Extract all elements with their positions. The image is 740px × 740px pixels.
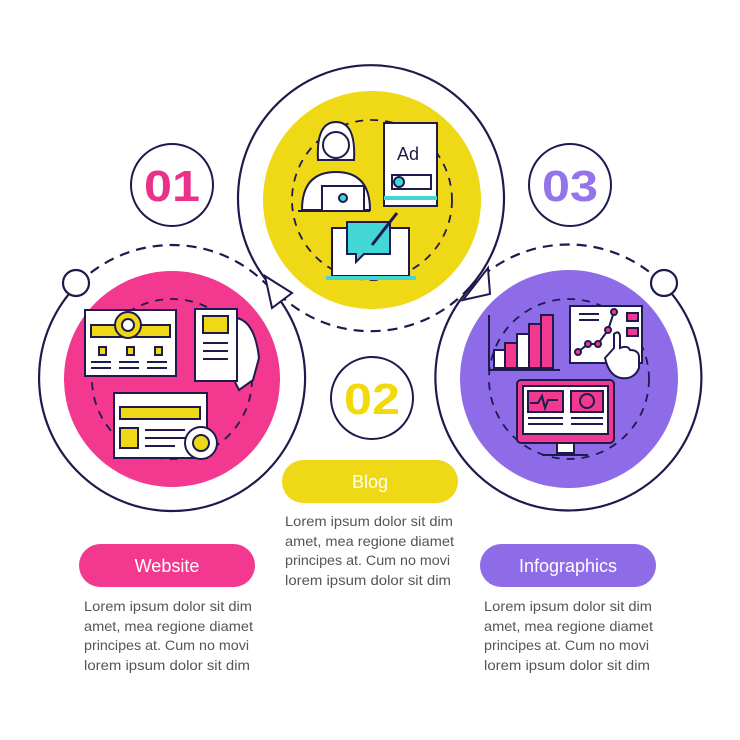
pill: Blog: Blog [352,472,388,492]
icon group: blog: Ad [397,144,419,164]
number badge 03: 03 [542,162,598,211]
icon group: website [85,309,259,459]
pill: Website: Website [135,556,199,576]
text: blog: amet, mea regione diamet [285,533,454,549]
ring: left [39,245,305,511]
text: website: Lorem ipsum dolor sit dim [84,598,252,614]
ring: top [238,65,504,331]
text: blog [285,513,454,588]
number badge 03 [529,144,611,226]
pill: Website [79,544,255,587]
purple circle [460,270,678,488]
small circle left [63,270,89,296]
icon group: infographics [489,306,642,455]
text: infographics: Lorem ipsum dolor sit dim [484,598,652,614]
icon group: blog [298,122,437,278]
inner dashed arcs [92,120,649,459]
text: blog: lorem ipsum dolor sit dim [285,572,451,588]
small circle right [651,270,677,296]
text: website: amet, mea regione diamet [84,618,253,634]
text: website: lorem ipsum dolor sit dim [84,657,250,673]
text: infographics [484,598,653,673]
pill: Infographics [480,544,656,587]
text: infographics: amet, mea regione diamet [484,618,653,634]
ring: right [435,244,701,510]
number badge 01 [131,144,213,226]
arrow right [463,268,490,300]
text: infographics: lorem ipsum dolor sit dim [484,657,650,673]
arrow left [265,276,292,308]
pill: Blog [282,460,458,503]
yellow circle [263,91,481,309]
number badge 02 [331,357,413,439]
text: blog: Lorem ipsum dolor sit dim [285,513,453,529]
text: website [84,598,253,673]
text: infographics: principes at. Cum no movi [484,637,649,653]
pink circle [64,271,280,487]
number badge 02: 02 [344,375,400,424]
text: website: principes at. Cum no movi [84,637,249,653]
pill: Infographics: Infographics [519,556,617,576]
text: blog: principes at. Cum no movi [285,552,450,568]
number badge 01: 01 [144,162,200,211]
